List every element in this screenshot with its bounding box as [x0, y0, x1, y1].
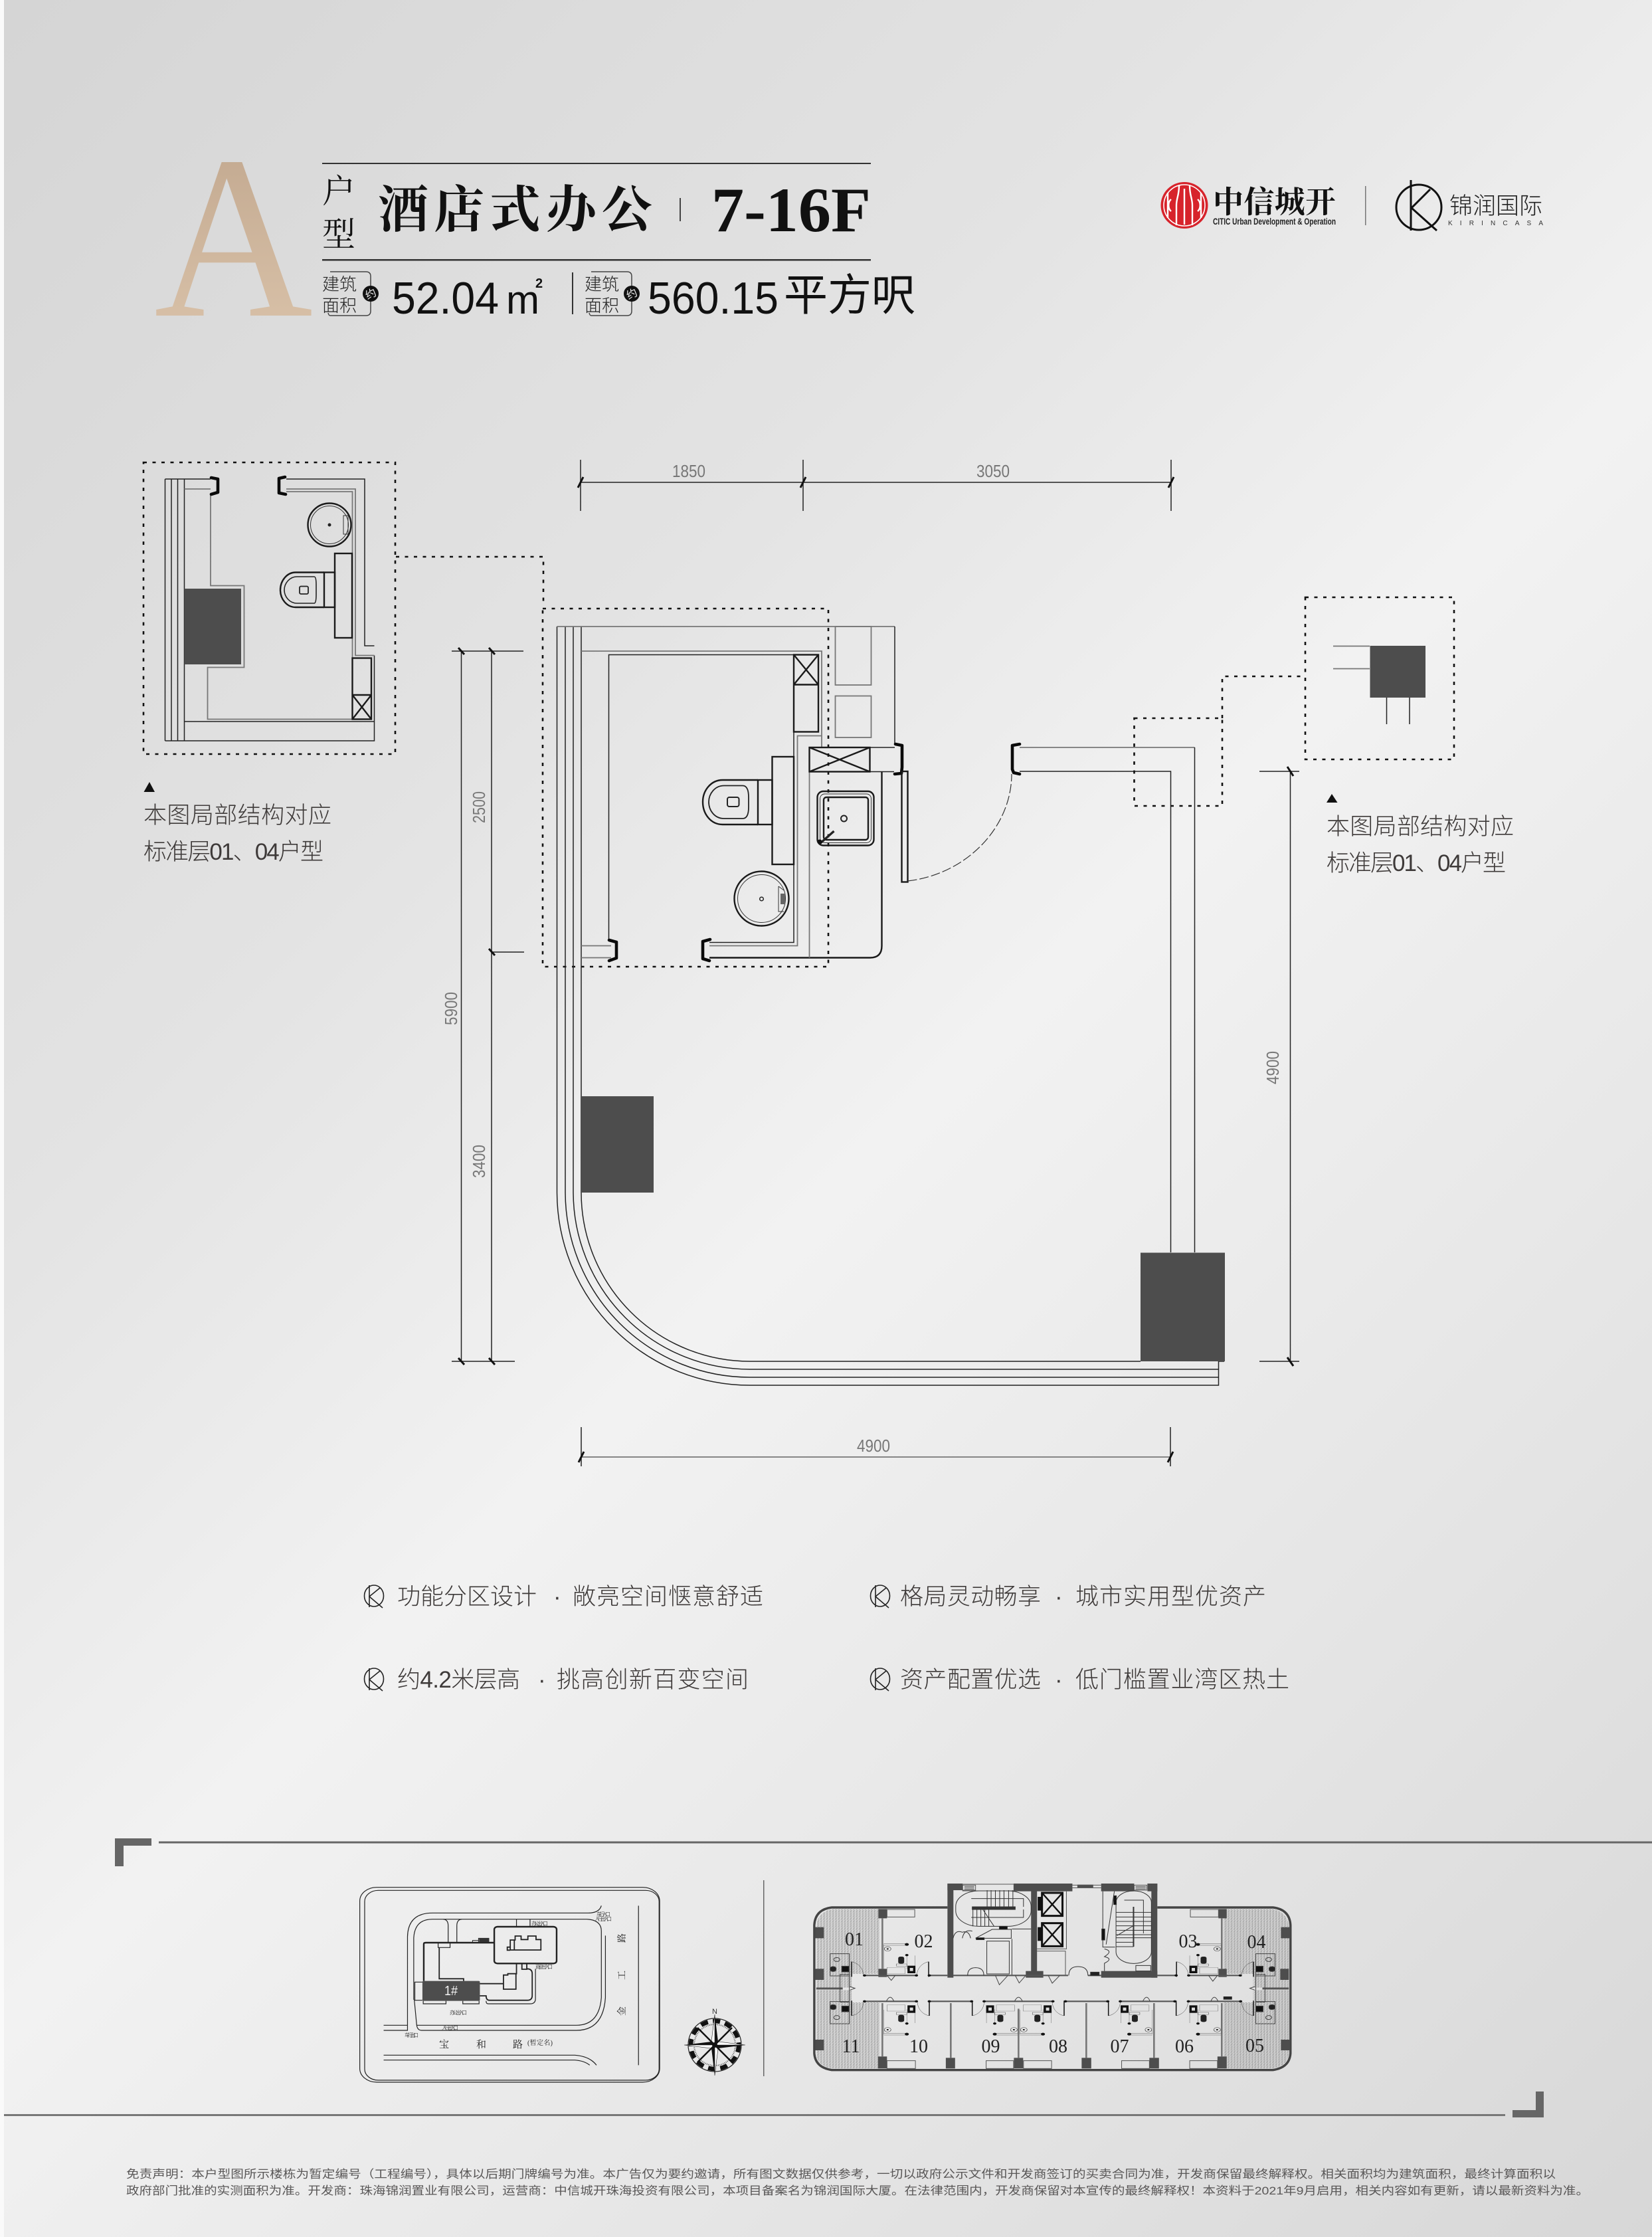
- entrance labels: 车行出口: [405, 2032, 418, 2038]
- unit numbers: 11: [842, 2036, 860, 2057]
- logo: CITIC: 中信城开: [1213, 185, 1336, 219]
- dimension left 5900 2500 3400: 3400: [469, 1145, 489, 1178]
- door leaf: [902, 771, 907, 882]
- wall lines: [165, 479, 375, 741]
- vent box: [794, 655, 818, 732]
- standard floor plan: [814, 1884, 1291, 2070]
- outer wall: [814, 1907, 1291, 2070]
- entrance labels: [405, 1911, 612, 2038]
- dotted small frame: [1135, 718, 1222, 806]
- unit numbers: 07: [1111, 2036, 1129, 2057]
- entrance labels: 人行出入口: [595, 1915, 612, 1922]
- note left: 本图局部结构对应: [143, 803, 331, 828]
- road labels: 宝: [439, 2039, 449, 2050]
- selling points: [364, 1584, 1289, 1693]
- dimension left 5900 2500 3400: 2500: [469, 791, 489, 823]
- structural column: [185, 589, 241, 664]
- road labels: (暂定名): [527, 2038, 553, 2047]
- unit bathrooms: [883, 1943, 1221, 2036]
- left stair: [953, 1890, 1031, 1975]
- panel: local structure detail left: [143, 462, 543, 754]
- top and interior walls: [557, 627, 895, 958]
- dimension top 1850 3050: 1850: [672, 461, 705, 481]
- selling point 2: 城市实用型优资产: [1075, 1584, 1266, 1610]
- columns: [581, 1096, 654, 1193]
- selling point 2: [870, 1584, 1266, 1610]
- unit numbers: 01: [845, 1929, 864, 1950]
- elevators: [1037, 1892, 1066, 1975]
- side unit bathrooms: [830, 1954, 1275, 2024]
- corridor door swings: [850, 1975, 1255, 2001]
- road labels: 路: [617, 1933, 628, 1943]
- selling point 4: ·: [1055, 1667, 1063, 1693]
- dimension top 1850 3050: [578, 460, 1174, 511]
- dimensions: [441, 460, 1299, 1466]
- area value 560.15 平方呎: [648, 270, 915, 324]
- label 户型: 户: [322, 173, 355, 210]
- dimension right 4900: 4900: [1263, 1051, 1283, 1084]
- road labels: 路: [513, 2039, 523, 2050]
- area value 52.04: 2: [535, 276, 543, 291]
- label 户型: [322, 173, 355, 253]
- selling point 3: [364, 1667, 749, 1693]
- large letter A: A: [154, 108, 313, 366]
- compass: N: [712, 2008, 717, 2016]
- panel: local structure detail right: [1135, 597, 1454, 806]
- dotted connector: [396, 557, 543, 607]
- area value 560.15 平方呎: 560.15: [648, 273, 779, 324]
- selling point 1: 功能分区设计: [397, 1584, 537, 1610]
- selling point 1: ·: [553, 1584, 561, 1610]
- unit numbers: 08: [1049, 2036, 1067, 2057]
- unit numbers: [842, 1929, 1266, 2057]
- corridor and partitions: [816, 1918, 1289, 2058]
- selling point 4: [870, 1667, 1289, 1693]
- area badge 1: [322, 272, 379, 316]
- kitchen sink: [817, 791, 874, 845]
- area badge 1: 面积: [322, 296, 357, 316]
- column: [1370, 646, 1425, 698]
- note left: 标准层01、04户型: [143, 839, 323, 865]
- dotted connector: [1222, 676, 1305, 718]
- floor plan main: [543, 609, 1225, 1385]
- bottom frame bottom rule: [4, 2114, 1505, 2116]
- basin: [308, 504, 351, 546]
- vanity: [772, 757, 794, 864]
- selling point 1: 敞亮空间惬意舒适: [573, 1584, 763, 1610]
- selling point 4: 低门槛置业湾区热土: [1075, 1667, 1289, 1693]
- area badge 2: [585, 272, 640, 316]
- road labels: 金: [617, 2006, 628, 2016]
- selling point 4: 资产配置优选: [900, 1667, 1041, 1693]
- disclaimer: [126, 2168, 1589, 2197]
- dotted callout frame: [143, 462, 395, 754]
- dimension left 5900 2500 3400: [441, 648, 524, 1365]
- road labels: [439, 1933, 628, 2050]
- toilet: [703, 780, 772, 825]
- note left: [143, 782, 331, 865]
- site plan: [360, 1888, 660, 2082]
- door swing arc: [907, 774, 1012, 881]
- area value 52.04: m: [506, 278, 539, 322]
- area badge 1: 约: [363, 286, 378, 302]
- selling point 3: ·: [538, 1667, 546, 1693]
- note right: [1327, 794, 1514, 876]
- dotted frame around bathroom: [543, 609, 828, 967]
- logo: Kirin Casa: [1396, 180, 1543, 231]
- title 酒店式办公: 酒店式办公: [378, 183, 652, 239]
- windows: [887, 1884, 1218, 2068]
- hatched corner units: [816, 1909, 1289, 2068]
- logo: CITIC: CITIC Urban Development & Operation: [1213, 217, 1336, 227]
- building label: 1#: [444, 1984, 458, 1998]
- bottom frame bottom right bracket: [1513, 2091, 1544, 2117]
- logo: Kirin Casa: KIRINCASA: [1448, 220, 1543, 227]
- disclaimer: 免责声明：本户型图所示楼栋为暂定编号（工程编号），具体以后期门牌编号为准。本广告仅为要约邀请，所有图文数据仅供参考，一切以政府公示文件和开发商签订的买卖合同为准，开发商保留最终解释权。相关面积均为建筑面积，最终计算面积以: [126, 2168, 1556, 2181]
- unit doors: [852, 1962, 1253, 2016]
- door jambs: [211, 477, 286, 494]
- vanity: [335, 553, 352, 638]
- shaft cross box: [809, 747, 870, 772]
- logos: [1161, 180, 1543, 231]
- entrance labels: 办公出入口: [531, 1920, 548, 1927]
- corridor wall end dots: [863, 1975, 1242, 2002]
- disclaimer: 政府部门批准的实测面积为准。开发商：珠海锦润置业有限公司，运营商：中信城开珠海投资有限公司，本项目备案名为锦润国际大厦。在法律范围内，开发商保留对本宣传的最终解释权！本资料于2021年9月启用，相关内容如有更新，请以最新资料为准。: [126, 2185, 1589, 2197]
- compass: [684, 2008, 745, 2076]
- dimension bottom 4900: 4900: [857, 1436, 890, 1456]
- header: unit title block: [154, 108, 915, 366]
- unit numbers: 05: [1245, 2036, 1264, 2056]
- unit numbers: 02: [914, 1931, 933, 1952]
- dotted callout frame: [1305, 597, 1454, 759]
- unit numbers: 10: [909, 2036, 928, 2057]
- road labels: 工: [618, 1971, 628, 1980]
- dimension bottom 4900: [579, 1427, 1173, 1466]
- core walls and columns: [815, 1884, 1289, 2068]
- note right: 本图局部结构对应: [1327, 814, 1514, 840]
- road labels: 和: [476, 2039, 486, 2050]
- floors 7-16F: 7-16F: [711, 175, 871, 245]
- right stair: [1069, 1891, 1151, 1975]
- selling point 3: 挑高创新百变空间: [557, 1667, 749, 1693]
- label 户型: 型: [322, 216, 355, 253]
- area badge 2: 面积: [585, 296, 619, 316]
- unit numbers: 03: [1178, 1931, 1197, 1952]
- toilet: [280, 573, 335, 607]
- note right: 标准层01、04户型: [1327, 850, 1506, 876]
- unit numbers: 04: [1247, 1932, 1266, 1953]
- entrance labels: 人行出入口: [442, 2024, 458, 2031]
- vertical divider: [763, 1880, 764, 2076]
- shafts: [836, 627, 872, 685]
- logo: Kirin Casa: 锦润国际: [1449, 193, 1542, 219]
- dimension right 4900: [1259, 767, 1299, 1366]
- door jambs: [609, 744, 1020, 961]
- basin: [735, 872, 789, 926]
- dimension top 1850 3050: 3050: [976, 461, 1010, 481]
- area value 560.15 平方呎: 平方呎: [784, 270, 915, 320]
- entry walls: [1020, 747, 1194, 1252]
- area badge 2: 建筑: [585, 274, 619, 294]
- unit numbers: 06: [1175, 2036, 1194, 2057]
- outer curved wall: [557, 627, 1224, 1385]
- bottom frame top rule: [159, 1842, 1652, 1843]
- selling point 1: [364, 1584, 763, 1610]
- area value 52.04: 52.04: [392, 273, 499, 324]
- selling point 2: 格局灵动畅享: [900, 1584, 1041, 1610]
- shower shaft box: [352, 658, 371, 719]
- selling point 2: ·: [1055, 1584, 1063, 1610]
- entrance labels: 办公出入口: [450, 2009, 467, 2016]
- logo: CITIC: [1161, 182, 1336, 229]
- selling point 3: 约4.2米层高: [397, 1667, 520, 1693]
- bottom frame top left bracket: [115, 1838, 151, 1866]
- area badge 1: 建筑: [322, 274, 357, 294]
- dimension left 5900 2500 3400: 5900: [441, 992, 461, 1025]
- entrance labels: 车行入口: [597, 1911, 610, 1917]
- unit numbers: 09: [982, 2036, 1000, 2057]
- entrance labels: 商业出入口: [535, 1963, 553, 1970]
- area badge 2: 约: [624, 286, 639, 302]
